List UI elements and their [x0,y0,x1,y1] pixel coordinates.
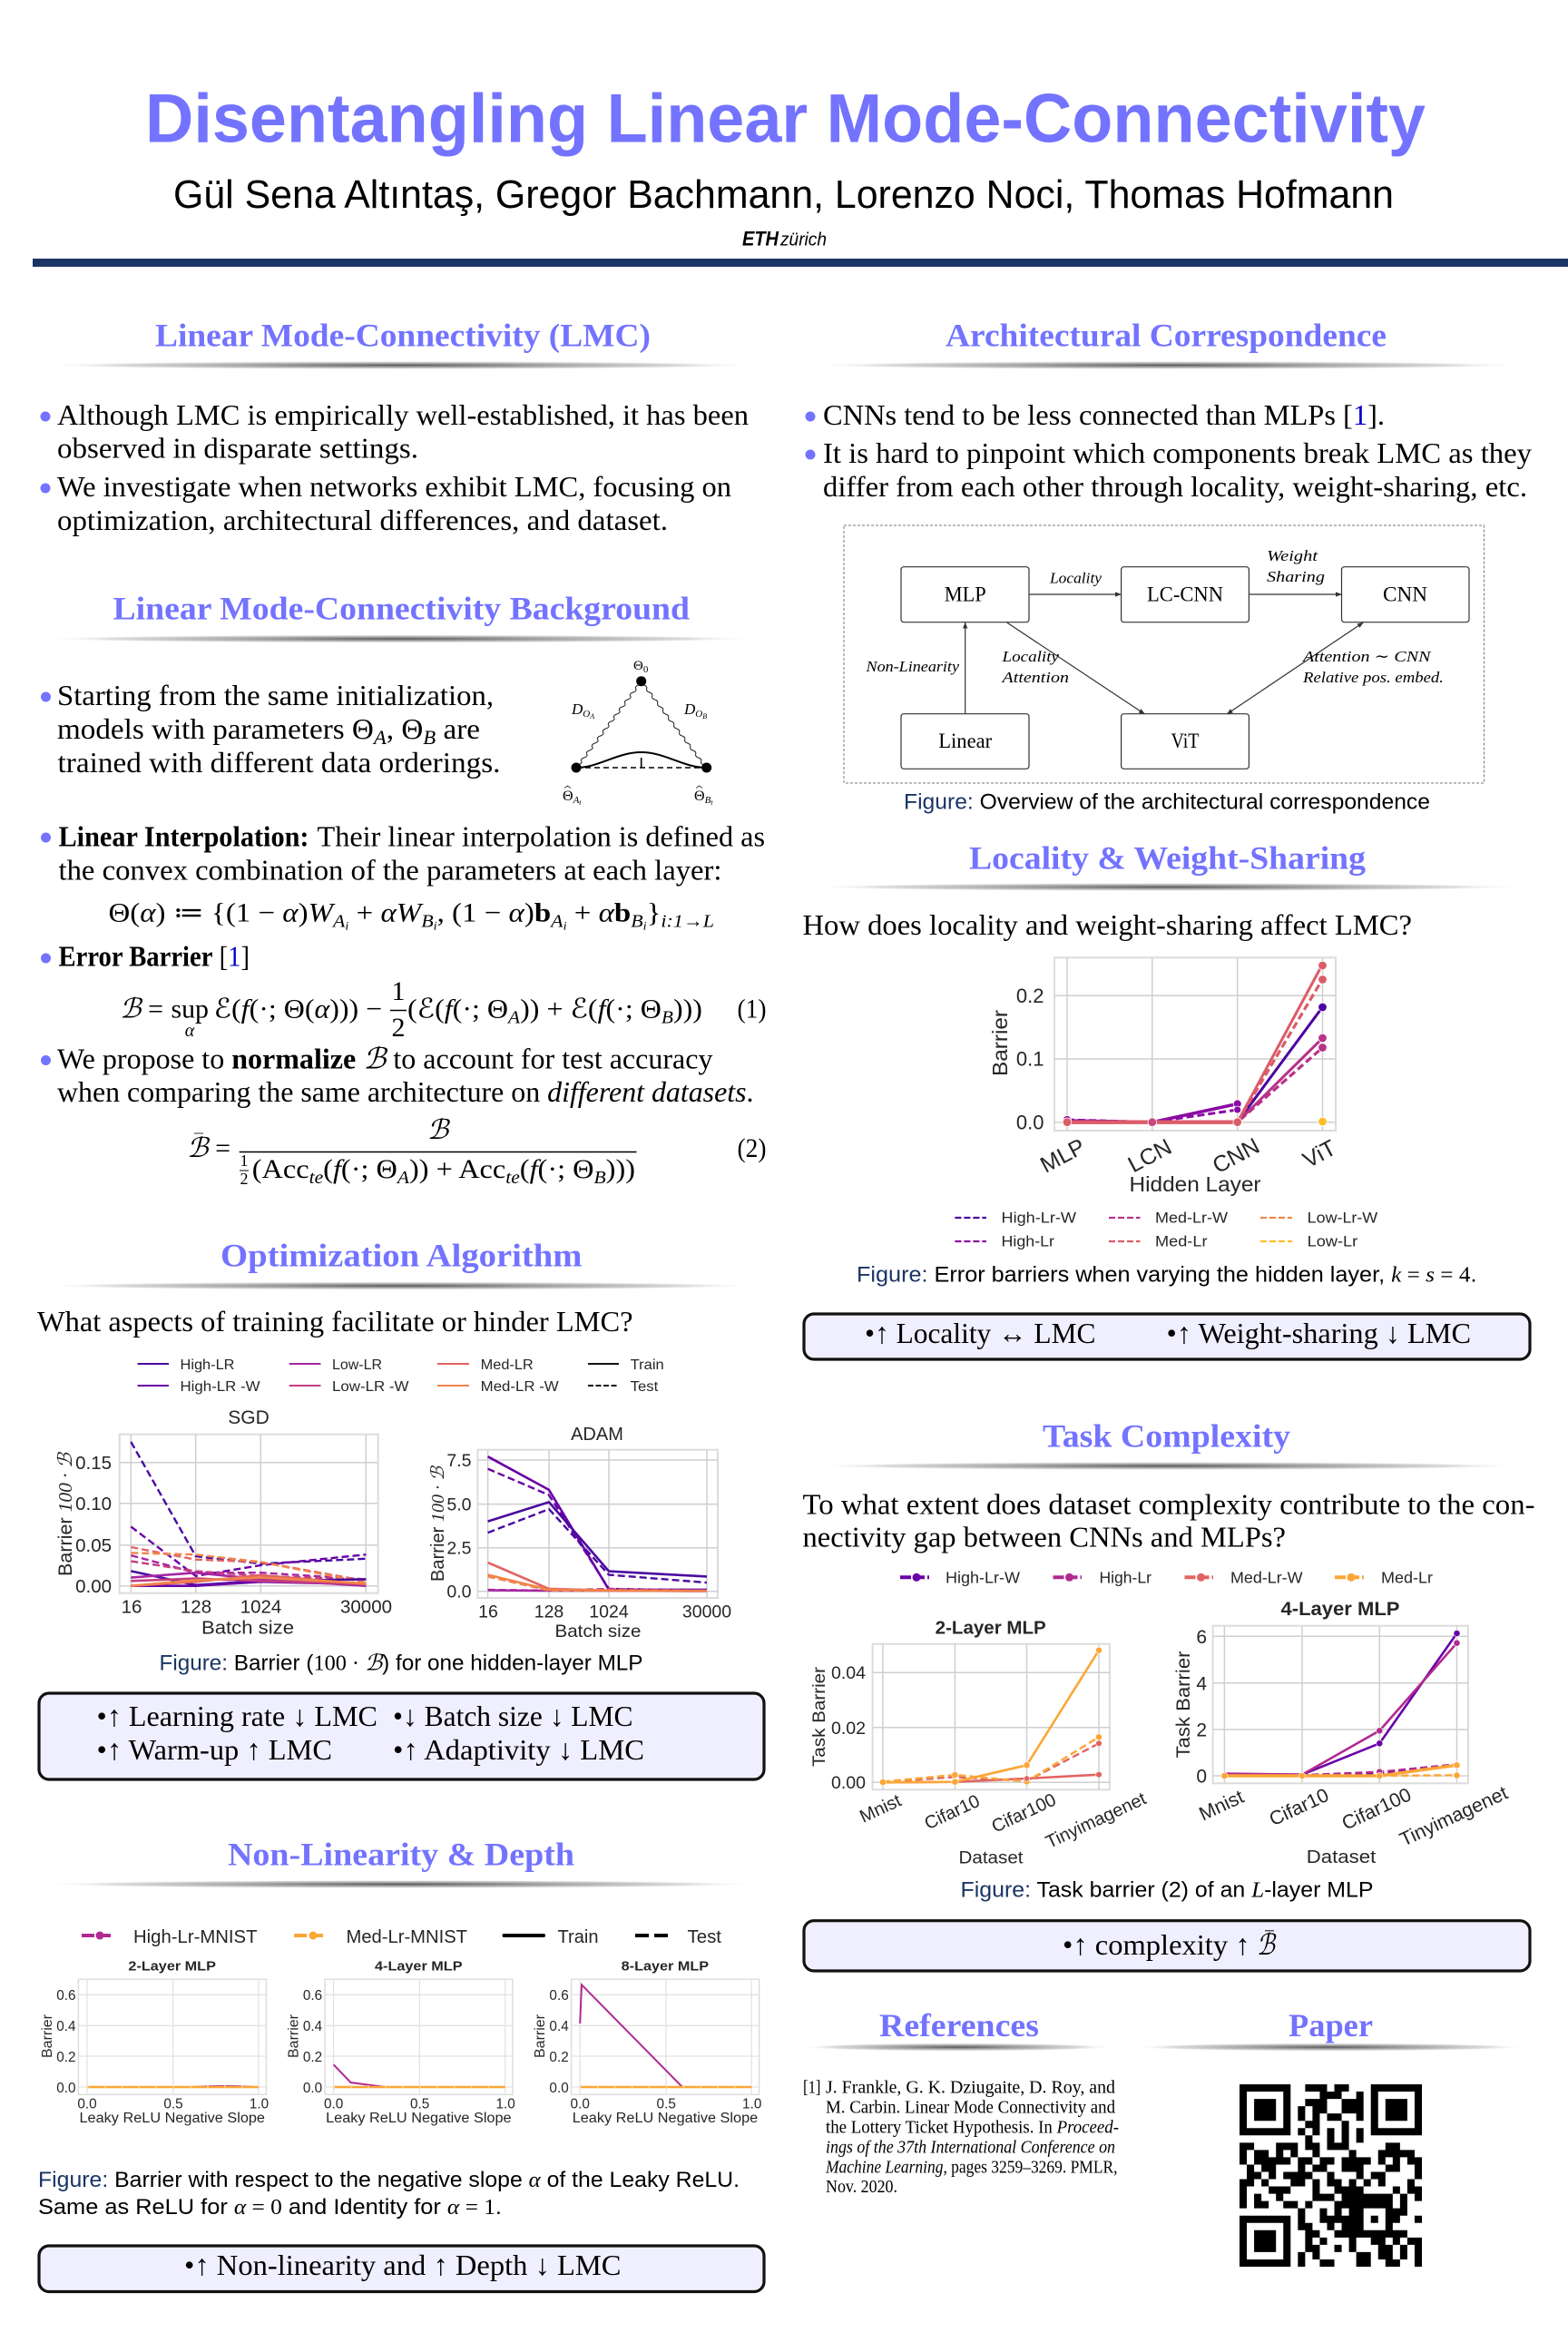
diagram: training triangle: A [589,712,594,720]
formula: interpolation: + [348,898,380,927]
formula: interpolation: A [549,911,564,931]
callout: optimization takeaways: •↑ Warm-up ↑ LMC [96,1733,332,1766]
callout: locality takeaways [804,1314,1530,1359]
chart: ADAM barrier: 5.0 [446,1495,472,1515]
chart: 2-Layer task barrier: Tinyimagenet [1043,1788,1150,1853]
chart: 4-Layer task barrier [1173,1599,1511,1867]
legend: optimization: Low-LR -W [332,1379,409,1395]
chart: 4-Layer task barrier: 0 [1196,1766,1207,1788]
callout: locality takeaways: •↑ Locality ↔ LMC [865,1317,1096,1349]
chart: 2-Layer MLP leaky ReLU: 0.6 [56,1988,76,2004]
text block: architecture bullets [806,398,1532,503]
formula: interpolation: i [564,918,567,933]
text block: normalize: We propose to normalize ℬ to account for test accuracy [57,1042,713,1074]
chart: 2-Layer MLP leaky ReLU: 0.2 [56,2050,76,2065]
diagram: training triangle: D [684,701,695,718]
chart: barrier by hidden layer [988,957,1340,1196]
diagram: training triangle: Θ [563,789,573,804]
text block: LMC bullets: We investigate when networks exhibit LMC, focusing on [57,470,731,503]
formula: interpolation: i [434,918,437,933]
chart: 4-Layer MLP leaky ReLU: 0.6 [303,1988,322,2004]
chart: 8-Layer MLP leaky ReLU: Barrier [533,2014,548,2058]
arrow: CNN to ViT [1227,622,1363,714]
edge labels: Non-Linearity [865,658,959,675]
chart: ADAM barrier: 16 [478,1602,498,1622]
text block: reference 1 [803,2078,1119,2197]
chart: 2-Layer MLP leaky ReLU: Barrier [40,2014,55,2058]
chart: SGD barrier: 0.15 [75,1453,112,1474]
text block: reference 1: Nov. 2020. [826,2178,897,2197]
edge labels: Locality [1049,570,1102,587]
formula: barrier equation 1: ℰ(f(·; Θ(α))) − [214,995,382,1024]
text block: normalize: when comparing the same architecture on different datasets. [57,1075,753,1108]
caption: architecture figure: Figure: Overview of the architectural correspondence [904,790,1430,815]
legend: task complexity: High-Lr-W [946,1569,1020,1587]
chart: SGD barrier: 0.05 [75,1535,112,1556]
arrow: MLP to ViT [1007,622,1145,714]
legend: optimization: Med-LR -W [481,1379,560,1395]
box: MLP: MLP [945,583,986,606]
legend: non-linearity: Med-Lr-MNIST [347,1927,467,1947]
chart: ADAM barrier: 30000 [682,1602,731,1622]
panel: Paper [1132,2007,1529,2263]
text block: starting from the same initialization: trained with different data orderings. [58,746,501,779]
box: CNN: CNN [1383,583,1427,606]
formula: interpolation: B [421,911,434,931]
formula: barrier equation 1: (1) [737,995,766,1024]
formula: interpolation: B [631,911,643,931]
edge labels: Locality [1001,648,1060,665]
diagram: training triangle: O [695,709,702,720]
formula: normalized barrier equation 2 [187,1115,766,1188]
legend: hidden layer: High-Lr-W [1002,1210,1076,1227]
legend: non-linearity: Train [557,1927,599,1947]
text block: reference 1: M. Carbin. Linear Mode Connectivity and [826,2098,1115,2118]
text block: normalize [41,1042,753,1108]
heading: Linear Mode-Connectivity Background [113,590,690,626]
box: Linear [901,714,1029,769]
diagram: training triangle: B [705,795,711,806]
formula: barrier equation 1: A [506,1007,521,1027]
chart: 8-Layer MLP leaky ReLU: 0.6 [549,1988,569,2004]
diagram: training triangle [563,659,713,807]
chart: ADAM barrier: Barrier 100 · ℬ [428,1465,448,1582]
formula: normalized barrier equation 2: ( [323,1154,333,1184]
legend: non-linearity [82,1927,721,1947]
callout: optimization takeaways: •↑ Learning rate ↓ LMC [96,1700,377,1732]
legend: optimization [138,1357,664,1395]
callout: complexity takeaway: ℬ [1257,1928,1277,1961]
legend: optimization: Test [631,1379,659,1395]
chart: barrier by hidden layer: 0.2 [1016,985,1044,1007]
chart: 4-Layer task barrier: Task Barrier [1173,1651,1194,1759]
diagram: architecture correspondence [844,525,1485,783]
chart: SGD barrier: Barrier 100 · ℬ [54,1451,76,1576]
diagram: training triangle: t [579,799,582,807]
text block: architecture bullets: CNNs tend to be less connected than MLPs [1]. [823,398,1385,431]
chart: 8-Layer MLP leaky ReLU: 0.5 [657,2096,676,2112]
formula: normalized barrier equation 2: ℬ [427,1115,451,1145]
box: CNN [1341,567,1469,622]
chart: 8-Layer MLP leaky ReLU: 1.0 [742,2096,761,2112]
chart: 8-Layer MLP leaky ReLU: 0.0 [571,2096,590,2112]
heading: Task Complexity [1043,1417,1290,1454]
formula: normalized barrier equation 2: 1 [240,1152,249,1170]
diagram: training triangle: B [702,712,707,720]
box: ViT: ViT [1171,730,1200,752]
chart: 8-Layer MLP leaky ReLU: 0.2 [549,2050,569,2065]
text block: reference 1: Machine Learning, pages 3259–3269. PMLR, [825,2158,1118,2178]
text block: question: How does locality and weight-sharing affect LMC? [802,908,1412,941]
callout: locality takeaways: •↑ Weight-sharing ↓ LMC [1167,1317,1471,1349]
caption: task barrier figure: Figure: Task barrier (2) of an L-layer MLP [960,1878,1373,1902]
chart: barrier by hidden layer: 0.0 [1016,1111,1044,1134]
chart: 4-Layer task barrier: 6 [1196,1627,1207,1648]
callout: optimization takeaways [39,1693,764,1779]
chart: 4-Layer MLP leaky ReLU: Barrier [287,2014,302,2058]
chart: SGD barrier: 16 [122,1597,142,1617]
chart: 4-Layer task barrier: 2 [1196,1720,1207,1740]
formula: interpolation: Θ(α) ≔ {(1 − α)W [109,898,331,927]
legend: task complexity: Med-Lr-W [1230,1569,1303,1587]
edge labels [865,547,1444,686]
formula: barrier equation 1: ))) [673,995,702,1024]
heading: References [879,2007,1039,2043]
caption: hidden layer figure: Figure: Error barriers when varying the hidden layer, k = s = 4. [857,1263,1477,1287]
chart: 4-Layer task barrier: Cifar100 [1338,1784,1415,1835]
panel: References [800,2007,1119,2197]
callout: complexity takeaway: •↑ complexity ↑ [1063,1928,1250,1961]
diagram: training triangle: t [710,799,713,807]
chart: 2-Layer MLP leaky ReLU: 0.0 [77,2096,97,2112]
diagram: training triangle: Θ [694,789,705,804]
formula: interpolation: } [647,898,661,927]
diagram: training triangle: 0 [643,664,649,675]
chart: 4-Layer task barrier: 4 [1196,1673,1207,1695]
title: Disentangling Linear Mode-Connectivity [145,80,1426,158]
legend: hidden layer: Med-Lr [1155,1234,1208,1250]
heading: Optimization Algorithm [220,1238,583,1274]
formula: normalized barrier equation 2: f(·; Θ [333,1154,393,1184]
chart: 4-Layer task barrier: Dataset [1307,1847,1377,1867]
box: LC-CNN: LC-CNN [1147,583,1223,606]
edge labels: Sharing [1267,568,1325,585]
chart: 2-Layer MLP leaky ReLU [40,1960,269,2126]
chart: 2-Layer MLP leaky ReLU: 2-Layer MLP [128,1960,216,1975]
heading: Paper [1289,2007,1373,2043]
text block: reference 1: ings of the 37th International Conference on [826,2138,1115,2158]
legend: task complexity [900,1569,1433,1587]
chart: barrier by hidden layer: 0.1 [1016,1047,1044,1071]
formula: normalized barrier equation 2: )) + Acc [409,1154,505,1184]
chart: 2-Layer task barrier: 0.04 [831,1663,866,1683]
chart: 4-Layer MLP leaky ReLU: 0.2 [303,2050,322,2065]
chart: barrier by hidden layer: CNN [1209,1133,1264,1179]
chart: SGD barrier: 1024 [240,1597,281,1617]
text block: LMC bullets: optimization, architectural differences, and dataset. [57,504,668,536]
chart: barrier by hidden layer: Hidden Layer [1129,1172,1261,1196]
text block: LMC bullets [40,398,749,536]
chart: 4-Layer MLP leaky ReLU: 0.0 [303,2081,322,2096]
panel: Task Complexity [802,1417,1535,1971]
chart: 4-Layer task barrier: 4-Layer MLP [1281,1599,1399,1620]
logo: ETH zürich: ETH [742,227,779,250]
text block: starting from the same initialization: Starting from the same initialization, [57,679,494,711]
chart: 4-Layer MLP leaky ReLU: 0.4 [303,2019,323,2034]
chart: ADAM barrier: 0.0 [446,1583,472,1602]
caption: leaky ReLU figure: Figure: Barrier with respect to the negative slope α of the Leaky ReLU. [38,2168,740,2192]
chart: 2-Layer MLP leaky ReLU: 0.4 [56,2019,76,2034]
legend: optimization: Med-LR [481,1357,534,1373]
formula: interpolation: A [331,911,346,931]
panel: Locality and Weight-Sharing [802,840,1530,1359]
chart: barrier by hidden layer: ViT [1298,1135,1340,1173]
icon: QR code [1240,2084,1422,2267]
diagram: training triangle: Θ [633,659,643,673]
formula: normalized barrier equation 2: B [594,1168,606,1188]
chart: SGD barrier: 30000 [340,1597,392,1617]
arrow: Linear to MLP [965,622,966,714]
chart: 4-Layer task barrier: Mnist [1196,1786,1247,1825]
text block: error barrier: Error Barrier [1] [58,940,250,973]
box: Linear: Linear [938,730,993,752]
chart: 2-Layer task barrier: Cifar10 [922,1791,983,1834]
panel: Linear Mode-Connectivity Background [37,590,766,1188]
text block: starting from the same initialization: are [436,712,480,745]
text block: LMC bullets: Although LMC is empirically well-established, it has been [57,398,749,431]
edge labels: Weight [1267,547,1319,564]
formula: normalized barrier equation 2: 2 [240,1170,249,1188]
formula: interpolation: + [567,898,599,927]
text block: architecture bullets: It is hard to pinpoint which components break LMC as they [823,436,1532,469]
text block: linear interpolation: Their linear interpolation is defined as [318,820,765,853]
arrow: MLP to LC-CNN [1029,593,1122,595]
chart: ADAM barrier: 7.5 [446,1451,472,1471]
caption: barrier figure: Figure: Barrier (100 · ℬ) for one hidden-layer MLP [160,1651,642,1675]
header bar [33,259,1568,267]
diagram: training triangle: A [573,795,580,806]
chart: 4-Layer MLP leaky ReLU: 0.5 [410,2096,429,2112]
logo: ETH zürich: zürich [779,230,827,250]
legend: task complexity: High-Lr [1100,1569,1152,1587]
box: LC-CNN [1122,567,1249,622]
chart: 4-Layer MLP leaky ReLU: 0.0 [324,2096,343,2112]
legend: hidden layer: Low-Lr [1308,1234,1358,1250]
chart: 2-Layer task barrier: 0.02 [831,1719,866,1739]
chart: 2-Layer task barrier: Task Barrier [809,1666,829,1767]
formula: normalized barrier equation 2: te [309,1168,323,1188]
legend: hidden layer: Med-Lr-W [1155,1210,1228,1227]
formula: interpolation: i [345,918,349,933]
text block: starting from the same initialization: models with parameters Θ [57,712,363,745]
formula: normalized barrier equation 2: f(·; Θ [530,1154,590,1184]
chart: SGD barrier: 0.00 [75,1576,112,1597]
formula: interpolation: α)b [509,898,550,927]
chart: 2-Layer task barrier: Dataset [958,1849,1024,1867]
formula: normalized barrier equation 2: ℬ = [187,1133,230,1163]
chart: 4-Layer task barrier: Cifar10 [1266,1784,1332,1830]
chart: ADAM barrier: Batch size [555,1622,641,1642]
text block: linear interpolation: Linear Interpolation: [58,820,309,853]
box: MLP [901,567,1029,622]
legend: task complexity: Med-Lr [1381,1569,1433,1587]
chart: 2-Layer task barrier: Cifar100 [989,1790,1059,1838]
formula: interpolation: αW [380,898,425,927]
legend: hidden layer [955,1210,1378,1250]
legend: optimization: High-LR [180,1357,234,1373]
legend: non-linearity: Test [688,1927,721,1947]
chart: 8-Layer MLP leaky ReLU: 0.4 [549,2019,569,2034]
formula: interpolation: , (1 − [437,898,509,927]
formula: barrier equation 1: 2 [392,1013,405,1043]
edge labels: Attention ∼ CNN [1302,648,1432,665]
text block: starting from the same initialization [41,679,501,779]
formula: interpolation: i [643,918,647,933]
text block: starting from the same initialization: B [423,726,436,749]
chart: ADAM barrier [428,1425,731,1642]
text block: question: nectivity gap between CNNs and MLPs? [802,1521,1286,1553]
formula: barrier equation 1: α [185,1021,195,1041]
formula: barrier equation 1: f(·; Θ [598,995,658,1024]
legend: optimization: Low-LR [332,1357,382,1373]
chart: 2-Layer task barrier: 0.00 [831,1773,866,1793]
chart: 8-Layer MLP leaky ReLU: Leaky ReLU Negative Slope [573,2111,758,2126]
chart: 2-Layer task barrier: Mnist [857,1790,905,1828]
heading: Architectural Correspondence [946,318,1387,354]
chart: SGD barrier: Batch size [201,1617,294,1639]
chart: 2-Layer MLP leaky ReLU: 1.0 [250,2096,269,2112]
legend: optimization: Train [631,1357,664,1373]
chart: SGD barrier: 128 [181,1597,211,1617]
text block: reference 1: J. Frankle, G. K. Dziugaite, D. Roy, and [826,2078,1115,2098]
formula: barrier equation 1 [120,976,766,1043]
caption: leaky ReLU figure [38,2168,740,2220]
text block: starting from the same initialization: , Θ [387,712,423,745]
callout: optimization takeaways: •↑ Adaptivity ↓ LMC [393,1733,644,1766]
chart: 4-Layer MLP leaky ReLU: 1.0 [495,2096,515,2112]
formula: barrier equation 1: (ℰ(f(·; Θ [407,995,505,1024]
panel: Linear Mode-Connectivity (LMC) [39,318,761,536]
callout: complexity takeaway [804,1921,1530,1971]
chart: ADAM barrier: ADAM [571,1425,623,1445]
logo: ETH zürich [742,227,827,250]
diagram: training triangle: O [583,709,590,720]
chart: 2-Layer task barrier [809,1619,1150,1867]
panel: Non-Linearity and Depth [37,1837,764,2292]
formula: barrier equation 1: 1 [392,976,405,1006]
text block: architecture bullets: differ from each other through locality, weight-sharing, etc. [823,470,1527,503]
heading: Locality & Weight-Sharing [969,840,1366,877]
text block: linear interpolation: the convex combination of the parameters at each layer: [58,853,722,886]
chart: 8-Layer MLP leaky ReLU: 0.0 [549,2081,569,2096]
callout: non-linearity takeaway [39,2246,764,2292]
formula: barrier equation 1: ℬ = [120,995,163,1024]
arrow: LC-CNN to CNN [1249,593,1341,595]
chart: 8-Layer MLP leaky ReLU: 8-Layer MLP [622,1960,710,1975]
chart: SGD barrier: SGD [228,1407,270,1428]
chart: 4-Layer MLP leaky ReLU: 4-Layer MLP [375,1960,463,1975]
chart: ADAM barrier: 1024 [589,1602,629,1622]
text block: LMC bullets: observed in disparate settings. [57,432,418,465]
text block: question [802,1488,1535,1553]
heading: Non-Linearity & Depth [228,1837,574,1873]
chart: 4-Layer MLP leaky ReLU: Leaky ReLU Negative Slope [326,2111,512,2126]
legend: optimization: High-LR -W [180,1379,260,1395]
text block: question: To what extent does dataset complexity contribute to the con- [802,1488,1535,1521]
formula: interpolation: i:1→L [661,911,714,931]
chart: 2-Layer task barrier: 2-Layer MLP [936,1619,1046,1639]
text block: linear interpolation [41,820,765,886]
diagram: training triangle: D [572,701,583,718]
chart: ADAM barrier: 128 [534,1602,564,1622]
text block: reference 1: the Lottery Ticket Hypothesis. In Proceed- [826,2118,1119,2138]
chart: SGD barrier [54,1407,392,1639]
edge labels: Relative pos. embed. [1302,669,1444,686]
chart: barrier by hidden layer: Barrier [988,1010,1012,1076]
text block: reference 1: [1] [803,2078,820,2098]
edge labels: Attention [1001,669,1069,686]
chart: 8-Layer MLP leaky ReLU [533,1960,761,2126]
chart: 2-Layer MLP leaky ReLU: 0.5 [163,2096,183,2112]
text block: question: What aspects of training facilitate or hinder LMC? [37,1305,633,1338]
chart: barrier by hidden layer: MLP [1036,1134,1090,1178]
heading: Linear Mode-Connectivity (LMC) [155,318,651,354]
text block: starting from the same initialization: A [372,726,387,749]
formula: normalized barrier equation 2: (2) [737,1133,766,1163]
box: ViT [1122,714,1249,769]
formula: normalized barrier equation 2: ( [520,1154,530,1184]
legend: hidden layer: Low-Lr-W [1308,1210,1378,1227]
chart: SGD barrier: 0.10 [75,1494,112,1514]
formula: normalized barrier equation 2: (Acc [252,1154,305,1184]
formula: normalized barrier equation 2: te [505,1168,520,1188]
chart: barrier by hidden layer: LCN [1124,1134,1176,1178]
authors: Gül Sena Altıntaş, Gregor Bachmann, Lorenzo Noci, Thomas Hofmann [173,173,1394,217]
legend: non-linearity: High-Lr-MNIST [133,1927,258,1947]
callout: optimization takeaways: •↓ Batch size ↓ LMC [393,1700,633,1732]
formula: interpolation: αb [599,898,630,927]
panel: Architectural Correspondence [806,318,1532,815]
formula: barrier equation 1: B [662,1007,673,1027]
formula: barrier equation 1: )) + ℰ( [520,995,598,1024]
chart: 4-Layer task barrier: Tinyimagenet [1396,1782,1511,1851]
chart: ADAM barrier: 2.5 [446,1539,472,1559]
caption: leaky ReLU figure: Same as ReLU for α = 0 and Identity for α = 1. [38,2195,502,2220]
legend: hidden layer: High-Lr [1002,1234,1055,1250]
chart: 2-Layer MLP leaky ReLU: 0.0 [56,2081,76,2096]
callout: non-linearity takeaway: •↑ Non-linearity and ↑ Depth ↓ LMC [184,2249,621,2281]
formula: barrier equation 1: sup [171,995,209,1024]
chart: 2-Layer MLP leaky ReLU: Leaky ReLU Negative Slope [80,2111,265,2126]
formula: normalized barrier equation 2: A [396,1168,410,1188]
panel: Optimization Algorithm [37,1238,764,1779]
formula: normalized barrier equation 2: ))) [606,1154,635,1184]
chart: 4-Layer MLP leaky ReLU [287,1960,515,2126]
